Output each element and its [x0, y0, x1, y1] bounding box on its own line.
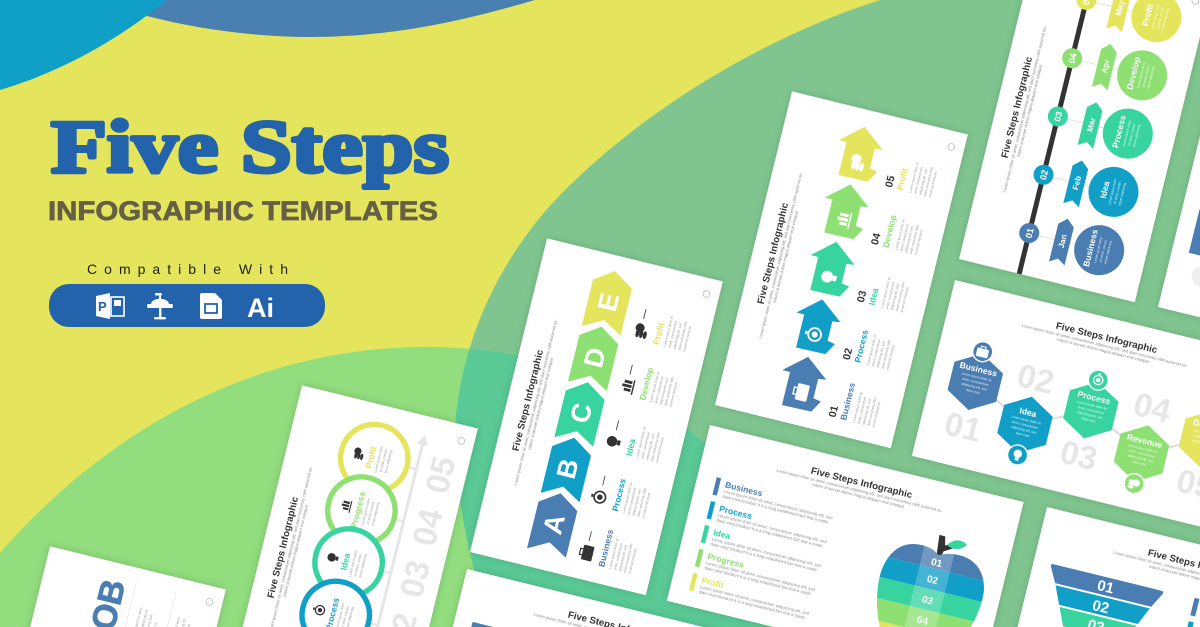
card [1004, 507, 1200, 627]
gray circle [1189, 264, 1200, 289]
leaf [947, 538, 967, 552]
list item Idea [700, 525, 824, 573]
step 02 Process: diam nonummy nibh [881, 339, 892, 369]
hex Idea: amet, consectetuer [1011, 420, 1040, 430]
list item Progress [695, 549, 818, 597]
list item Business: Business [724, 480, 764, 498]
background: large green circle [455, 0, 1200, 627]
step Feb Idea: sit amet, consec [1113, 181, 1122, 205]
slide title: Five Steps Infographic [266, 495, 301, 599]
step: Progress: Lorem ipsum dolor [361, 497, 371, 525]
step E Profit [582, 267, 701, 352]
step A Business: amet, consectetuer [613, 541, 624, 571]
step B Process: adipiscing elit, sed [631, 489, 642, 516]
step A Business: A [537, 511, 571, 537]
hex Process: adipiscing elit, sed [1077, 410, 1103, 420]
step 05 Profit: Profit [895, 167, 910, 191]
gray numbers: 02 [1014, 356, 1058, 401]
step E Profit: euismod tincidunt. [682, 325, 692, 352]
step Apr Develop: Develop [1125, 56, 1142, 91]
step A Business: adipiscing elit, sed [618, 544, 628, 572]
step Jan Business: sit amet, consec [1098, 239, 1108, 263]
axis numbers: 05 [418, 453, 463, 497]
slide title: Five Steps Infographic [1055, 321, 1159, 356]
slide subtitle: Lorem ipsum dolor sit amet, consectetuer adipiscing elit, sed diam nonummy nibh euismod tin- [1002, 25, 1048, 193]
apple numbers: 03 [921, 594, 934, 608]
step Apr Develop: Apr [1100, 59, 1112, 74]
step D Develop: D [578, 345, 612, 371]
step: Profit: sit amet, consec [379, 448, 388, 472]
step May Profit: sit amet, consec [1156, 6, 1165, 30]
heading: Five Steps: Five Steps [51, 106, 449, 189]
step C Idea: diam nonummy nibh [650, 432, 661, 462]
slide subtitle: cidunt ut laoreet dolore magna aliquam erat volutpat. [1016, 64, 1043, 158]
step 02 Process [788, 294, 902, 370]
apple numbers [910, 557, 944, 627]
slide subtitle: cidunt ut laoreet dolore magna aliquam erat volutpat. [527, 357, 554, 451]
step 01 Business: 01 [827, 404, 841, 419]
step E Profit: Profit [651, 321, 666, 346]
step: Process [295, 574, 377, 627]
funnel numbers [1086, 577, 1116, 627]
funnel bands [1033, 564, 1164, 627]
step May Profit: Profit [1140, 3, 1155, 27]
step 04 Develop [817, 179, 930, 255]
step 01 Business [774, 352, 888, 428]
step 05 Profit: amet, consectetuer [913, 165, 924, 194]
icon: Google Slides [200, 293, 222, 319]
hex Process: Process [1077, 389, 1112, 406]
step Apr Develop: 04 [1067, 52, 1079, 64]
list item Process: diam mod tincidunt It is a long established fact that a reade [716, 517, 824, 549]
step E Profit: Lorem ipsum dolor sit [663, 316, 674, 347]
step C Idea: adipiscing elit, sed [645, 433, 655, 461]
axis arrow [343, 433, 431, 627]
step Mar Process: Process [1110, 114, 1128, 149]
gray numbers: 01 [941, 404, 985, 449]
step 05 Profit: 05 [883, 174, 898, 189]
hex Revenue: diam mod [1132, 460, 1147, 467]
step: Profit [333, 417, 415, 499]
background: light green hill [0, 347, 840, 627]
step C Idea: C [564, 400, 598, 426]
hex Develop [1175, 404, 1200, 473]
axis numbers [367, 453, 463, 627]
hex Idea: adipiscing elit, sed [1011, 425, 1037, 435]
step 01 Business: adipiscing elit, sed [862, 398, 872, 425]
step Mar Process: sit amet, consec [1127, 123, 1136, 146]
step 02 Process: euismod tincidunt. [885, 344, 896, 370]
step Apr Develop [1056, 32, 1172, 106]
apple chart [877, 534, 984, 627]
card [715, 91, 968, 448]
list item Idea: Idea [712, 527, 732, 541]
gray numbers: 04 [1130, 385, 1175, 430]
panel: bottom slide [424, 569, 781, 627]
hex Revenue [1107, 419, 1173, 499]
step: Idea: Idea [338, 552, 352, 571]
slide subtitle: cidunt ut laoreet dolore magna aliquam erat volutpat. [282, 504, 309, 598]
list item Business: diam mod tincidunt It is a long established fact that a reade [722, 494, 830, 525]
step B Process: B [551, 456, 585, 482]
step 05 Profit: adipiscing elit, sed [918, 168, 928, 196]
step Jan Business [1014, 206, 1129, 280]
hex Revenue: Revenue [1126, 432, 1163, 450]
step C Idea: Lorem ipsum dolor sit [635, 427, 647, 458]
step 03 Idea: adipiscing elit, sed [890, 283, 900, 310]
list item Profit [689, 573, 813, 621]
list item Process: Lorem ipsum dolor sit amet, consectetuer adipiscing elit, sed [717, 513, 828, 544]
step 01 Business: Lorem ipsum dolor sit [852, 391, 863, 423]
background: teal overlap [456, 348, 774, 627]
stem [935, 535, 957, 559]
axis numbers: 04 [405, 504, 450, 550]
step E Profit: amet, consectetuer [668, 319, 678, 348]
step Apr Develop: tetuer adipiscing [1146, 66, 1156, 89]
step 02 Process: amet, consectetuer [871, 338, 882, 367]
hex Revenue: adipiscing elit, sed [1127, 453, 1154, 463]
list item Profit: Profit [701, 575, 725, 590]
step 03 Idea: diam nonummy nibh [895, 282, 906, 312]
step E Profit: E [592, 290, 625, 314]
step Feb Idea: 02 [1038, 169, 1050, 181]
blue shape [1189, 209, 1200, 263]
step 01 Business: euismod tincidunt. [871, 401, 882, 428]
step 04 Develop: Lorem ipsum dolor sit [894, 219, 906, 251]
background: cyan corner [0, 0, 167, 90]
step 01 Business: amet, consectetuer [857, 395, 868, 424]
slide subtitle: Lorem ipsum dolor sit amet, consectetuer adipiscing elit, sed diam nonummy nibh euismod tin- [513, 318, 559, 486]
hex Business [944, 336, 1009, 416]
step 04 Develop: euismod tincidunt. [914, 229, 924, 255]
hex Business: Business [959, 360, 998, 379]
step 04 Develop: adipiscing elit, sed [904, 226, 914, 253]
step: Profit: Lorem ipsum dolor [373, 445, 384, 473]
hex Revenue: Lorem ipsum dolor sit [1127, 443, 1158, 454]
hex Revenue: amet, consectetuer [1128, 448, 1156, 459]
step 01 Business: diam nonummy nibh [866, 397, 877, 427]
step 04 Develop: 04 [869, 232, 883, 246]
legend bars [1185, 598, 1199, 627]
panel: hexagon slide [912, 280, 1200, 533]
hex Process [1060, 364, 1125, 444]
connector line [968, 382, 1200, 468]
step 02 Process: 02 [841, 347, 855, 361]
card [1158, 0, 1200, 350]
hex Business: amet, consectetuer [962, 377, 990, 387]
step Mar Process: Mar [1085, 117, 1097, 133]
step Jan Business: 01 [1024, 227, 1036, 239]
step Mar Process: tetuer adipiscing [1132, 124, 1141, 148]
step 05 Profit [831, 122, 944, 198]
step A Business: Lorem ipsum dolor sit [608, 538, 619, 569]
hex Idea [991, 391, 1056, 471]
text: Compatible With: Compatible With [87, 261, 288, 277]
hex Idea: Lorem ipsum dolor sit [1011, 414, 1042, 426]
step Feb Idea [1028, 148, 1144, 222]
step Feb Idea: Feb [1071, 175, 1083, 191]
gray numbers: 03 [1057, 433, 1101, 477]
panel: timeline slide [959, 0, 1200, 302]
hex Process: diam mod [1081, 416, 1096, 424]
panel: circles slide [225, 385, 478, 627]
step Mar Process: 03 [1052, 111, 1064, 123]
step Mar Process [1042, 90, 1158, 164]
panel: apple slide [665, 425, 1024, 627]
step May Profit [1071, 0, 1187, 47]
step A Business: euismod tincidunt. [627, 547, 638, 574]
slide title: Five Steps Infographic [756, 201, 791, 305]
slide subtitle: cidunt ut laoreet dolore magna aliquam erat volutpat. [772, 210, 799, 304]
step: Idea: Lorem ipsum dolor [348, 549, 358, 577]
step D Develop: euismod tincidunt. [668, 381, 679, 407]
step C Idea: euismod tincidunt. [655, 436, 665, 463]
panel: A-E chevron slide [470, 238, 723, 595]
step D Develop: Lorem ipsum dolor sit [649, 371, 660, 403]
list item Idea: Lorem ipsum dolor sit amet, consectetuer adipiscing elit, sed [711, 537, 822, 568]
step Jan Business: Lorem ipsum dolor [1093, 236, 1103, 263]
step: Idea: tetuer adipiscing [358, 554, 368, 578]
list item Process: Process [718, 503, 753, 521]
step 04 Develop: amet, consectetuer [899, 223, 910, 252]
step: Profit: Profit [363, 445, 378, 469]
step Jan Business: tetuer adipiscing [1103, 240, 1113, 264]
icon: Keynote [147, 293, 173, 319]
funnel numbers: 02 [1091, 597, 1111, 617]
step 02 Process: adipiscing elit, sed [876, 341, 886, 368]
list item Progress: diam mod tincidunt It is a long established fact that a reade [704, 565, 812, 596]
subheading: Infographic Templates: INFOGRAPHIC TEMPLATES [48, 196, 438, 226]
step 03 Idea: 03 [855, 289, 869, 304]
apple numbers: 02 [926, 574, 939, 587]
list item Process [706, 501, 830, 549]
step: Idea: sit amet, consec [353, 552, 363, 577]
list item Progress: Lorem ipsum dolor sit amet, consectetuer adipiscing elit, sed [705, 560, 816, 592]
step B Process: diam nonummy nibh [636, 487, 647, 517]
step 03 Idea [802, 237, 916, 313]
apple bands [877, 544, 984, 627]
blue element [468, 622, 504, 627]
panel: right edge slide [1158, 0, 1200, 350]
slide subtitle: Lorem ipsum dolor sit amet, consectetuer adipiscing elit, sed diam nonummy nibh euismod tin- [1021, 323, 1189, 369]
card [667, 425, 1024, 627]
step 01 Business: Business [838, 381, 857, 421]
step Feb Idea: tetuer adipiscing [1117, 182, 1127, 206]
step B Process: amet, consectetuer [627, 486, 637, 515]
step 03 Idea: Lorem ipsum dolor sit [880, 276, 892, 308]
pill background [49, 284, 325, 327]
step Apr Develop: Lorem ipsum dolor [1136, 61, 1146, 88]
step 05 Profit: euismod tincidunt. [928, 171, 938, 198]
hex Business: diam mod [966, 388, 980, 395]
panel: upward arrows slide [715, 91, 968, 448]
list item Business [712, 477, 836, 525]
step 05 Profit: diam nonummy nibh [923, 167, 934, 197]
hex Business: adipiscing elit, sed [961, 382, 987, 392]
background: steel blue wave [130, 0, 535, 37]
icon: PowerPoint: P [98, 299, 107, 314]
step A Business: Business [596, 528, 615, 568]
card [470, 238, 723, 595]
step D Develop [568, 323, 687, 407]
slide title: Five Steps Infographic [810, 466, 914, 501]
step: Progress [321, 470, 402, 551]
step D Develop: adipiscing elit, sed [659, 378, 669, 405]
step B Process: Lorem ipsum dolor sit [622, 482, 633, 514]
hex Idea: Idea [1019, 405, 1038, 419]
apple numbers: 01 [930, 557, 944, 570]
icon: Adobe Illustrator: Ai [247, 293, 274, 323]
step D Develop: amet, consectetuer [654, 375, 665, 404]
step 03 Idea: Idea [867, 287, 880, 306]
slide title: Five Steps Infographic [511, 348, 546, 452]
step 02 Process: Process [852, 329, 870, 364]
step: Progress: sit amet, consec [366, 500, 375, 525]
step: Progress: tetuer adipiscing [371, 502, 380, 526]
card [0, 546, 226, 627]
step 03 Idea: euismod tincidunt. [900, 286, 910, 313]
hex Business: Lorem ipsum dolor sit [961, 371, 992, 383]
list item Business: Lorem ipsum dolor sit amet, consectetuer adipiscing elit, sed [723, 489, 834, 521]
slide subtitle: Lorem ipsum dolor sit amet, consectetuer adipiscing elit, sed diam nonummy nibh euismod tin- [758, 171, 804, 339]
slide subtitle: cidunt ut laoreet dolore magna aliquam erat volutpat. [1056, 337, 1150, 364]
step B Process: euismod tincidunt. [641, 492, 651, 519]
step Mar Process: Lorem ipsum dolor [1122, 119, 1132, 147]
step Feb Idea: Lorem ipsum dolor [1107, 177, 1118, 205]
step 02 Process: Lorem ipsum dolor sit [866, 334, 877, 366]
list item Profit: Lorem ipsum dolor sit amet, consectetuer adipiscing elit, sed [700, 584, 810, 616]
step E Profit: adipiscing elit, sed [672, 322, 683, 350]
list item Progress: Progress [706, 551, 745, 570]
step B Process [541, 434, 660, 519]
card [959, 0, 1200, 302]
slide subtitle: cidunt ut laoreet dolore magna aliquam erat volutpat. [811, 482, 905, 509]
panel: OB slide [0, 546, 226, 627]
step C Idea: amet, consectetuer [640, 430, 651, 459]
step Feb Idea: Idea [1098, 180, 1112, 199]
step 03 Idea: amet, consectetuer [885, 280, 896, 309]
axis numbers: 03 [392, 557, 437, 601]
step: Profit: tetuer adipiscing [384, 449, 393, 474]
funnel numbers: 01 [1095, 577, 1116, 598]
step 04 Develop: Develop [881, 214, 898, 249]
icon: PowerPoint [96, 293, 124, 319]
gray numbers [941, 342, 1200, 506]
hex Process: amet, consectetuer [1077, 405, 1105, 416]
step D Develop: Develop [637, 366, 655, 401]
step: Progress: Progress [349, 490, 367, 529]
card [225, 385, 478, 627]
step E Profit: diam nonummy nibh [677, 321, 688, 351]
list item Profit: diam mod tincidunt It is a long established fact that a reade [698, 589, 806, 620]
step C Idea: Idea [624, 438, 638, 457]
step A Business: diam nonummy nibh [623, 543, 634, 573]
step A Business [527, 489, 646, 574]
step May Profit: tetuer adipiscing [1160, 7, 1170, 31]
step Apr Develop: sit amet, consec [1141, 64, 1151, 88]
hex Process: Lorem ipsum dolor sit [1077, 400, 1107, 411]
compatibility pill with app icons [49, 284, 325, 327]
step Jan Business: Jan [1057, 233, 1069, 249]
step D Develop: diam nonummy nibh [664, 376, 675, 406]
step May Profit: May [1114, 0, 1126, 17]
step Jan Business: Business [1081, 228, 1100, 268]
timeline bar [1017, 0, 1099, 274]
step B Process: Process [610, 477, 628, 512]
step 04 Develop: diam nonummy nibh [909, 224, 920, 254]
hex Idea: diam mod [1015, 431, 1030, 438]
step: Idea [308, 522, 389, 603]
slide subtitle: Lorem ipsum dolor sit amet, consectetuer adipiscing elit, sed diam nonummy nibh euismod tin- [776, 468, 944, 514]
slide title: Five Steps Infographic [1000, 55, 1035, 159]
step 05 Profit: Lorem ipsum dolor sit [908, 161, 920, 193]
panel: funnel slide [1004, 507, 1200, 627]
step C Idea [555, 378, 673, 463]
list item Idea: diam mod tincidunt It is a long established fact that a reade [710, 541, 818, 572]
step May Profit: Lorem ipsum dolor [1150, 3, 1161, 30]
card [912, 280, 1200, 533]
card [424, 569, 781, 627]
